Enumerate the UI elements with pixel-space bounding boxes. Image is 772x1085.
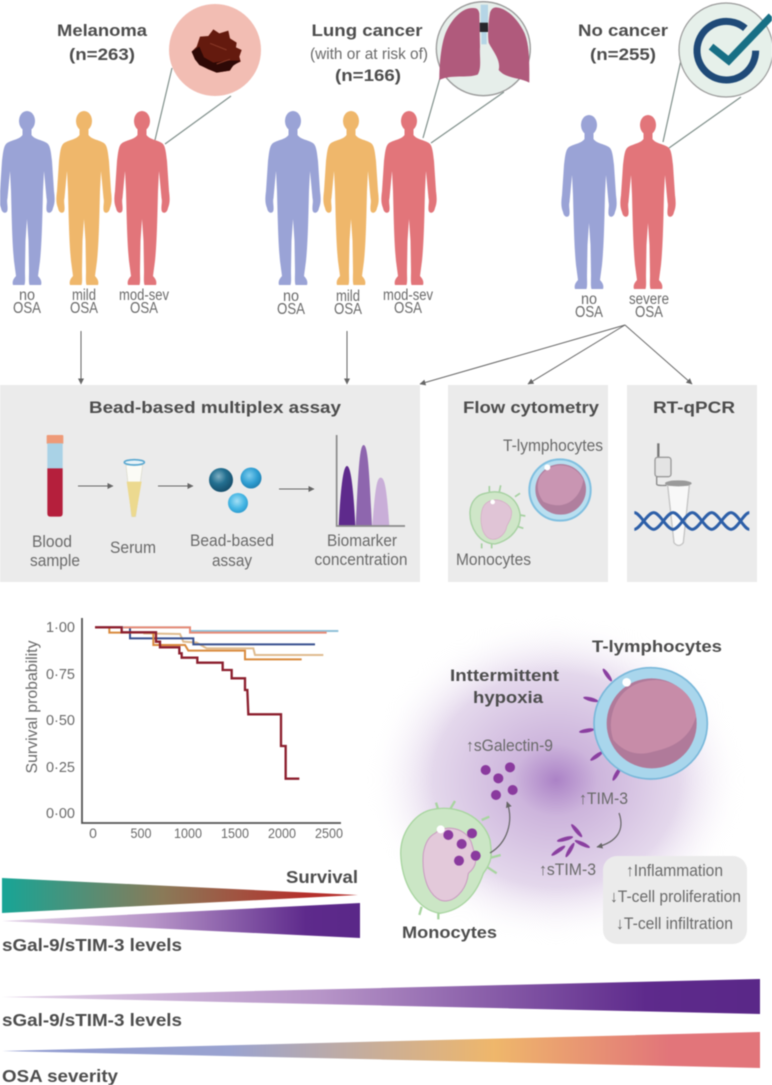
y-axis tick labels: 1·00 — [46, 620, 75, 636]
labels: lung OSA groups — [277, 287, 433, 318]
label: biomarker concentration: Biomarker — [327, 532, 397, 550]
y-axis tick labels: 0·75 — [46, 667, 75, 683]
axes — [82, 618, 341, 823]
labels: lung OSA groups: OSA — [334, 301, 363, 318]
person: lung mod-sev OSA — [381, 111, 437, 285]
chart: biomarker peaks — [337, 435, 405, 526]
heading: No cancer group: No cancer — [578, 21, 668, 40]
label: blood sample — [30, 533, 80, 570]
label: biomarker concentration — [314, 532, 408, 569]
arrow: TIM-3 to sTIM-3 — [597, 813, 621, 847]
arrow: monocyte to sGalectin-9 — [490, 802, 510, 853]
arrow: blood to serum — [78, 485, 113, 487]
labels: melanoma OSA groups: OSA — [70, 300, 99, 317]
labels: no cancer OSA groups: severe — [629, 291, 669, 308]
callout: immune effects: ↓T-cell proliferation — [610, 888, 741, 906]
icon: sGalectin-9 dots — [481, 762, 518, 800]
callout lines: lung — [423, 78, 504, 143]
person: melanoma mild OSA — [56, 111, 112, 285]
label: bead-based assay: assay — [212, 552, 253, 570]
label: sTIM-3: ↑sTIM-3 — [539, 861, 596, 879]
heading: bead-based multiplex assay: Bead-based multiplex assay — [89, 398, 342, 417]
label: bead-based assay — [190, 532, 274, 570]
icon: checkmark — [679, 3, 772, 97]
label: Monocytes heading: Monocytes — [402, 923, 497, 942]
x-axis tick labels: 1000 — [174, 825, 202, 841]
person: lung mild OSA — [323, 111, 379, 285]
icon: monocyte large — [401, 801, 501, 919]
heading: flow cytometry: Flow cytometry — [463, 398, 600, 417]
survival curves — [95, 627, 338, 779]
label: blood sample: Blood — [32, 533, 72, 551]
heading: Lung cancer group — [310, 21, 428, 85]
labels: melanoma OSA groups: mild — [72, 287, 96, 304]
heading: Melanoma group: (n=263) — [69, 45, 135, 64]
labels: melanoma OSA groups: OSA — [13, 300, 42, 317]
wedge: survival — [2, 878, 358, 913]
label: intermittent hypoxia: Inttermittent — [450, 666, 559, 685]
person: melanoma mod-sev OSA — [114, 111, 170, 285]
label: T-lymphocytes heading: T-lymphocytes — [592, 637, 722, 656]
label: sGalectin-9: ↑sGalectin-9 — [466, 737, 553, 755]
background glow: intermittent hypoxia — [366, 615, 746, 945]
label: Monocytes: Monocytes — [456, 551, 531, 569]
label: blood sample: sample — [30, 552, 80, 570]
y-axis title: Survival probability — [24, 640, 41, 774]
label: bead-based assay: Bead-based — [190, 532, 274, 550]
labels: lung OSA groups: mod-sev — [383, 287, 433, 304]
callout: immune effects — [603, 856, 747, 944]
x-axis tick labels: 2500 — [315, 825, 343, 841]
x-axis tick labels: 0 — [89, 825, 97, 841]
person: lung no OSA — [265, 111, 321, 285]
icon: blood tube — [47, 435, 63, 517]
labels: lung OSA groups: mild — [336, 288, 360, 305]
panel: bead-based multiplex assay — [0, 385, 420, 582]
icon: sTIM-3 fragments — [550, 823, 591, 858]
label: sGal-9/sTIM-3 levels upper: sGal-9/sTIM-3 levels — [2, 935, 182, 955]
arrow: serum to beads — [158, 485, 193, 487]
y-axis tick labels: 0·25 — [46, 760, 75, 776]
icon: serum tube — [124, 460, 144, 517]
panel: flow cytometry — [448, 385, 608, 582]
callout: immune effects: ↓T-cell infiltration — [616, 915, 733, 933]
label: intermittent hypoxia: hypoxia — [473, 688, 544, 707]
x-axis tick labels: 1500 — [221, 825, 249, 841]
callout: immune effects: ↑Inflammation — [626, 862, 723, 880]
chart: Kaplan-Meier survival curves — [24, 618, 343, 841]
label: sGal-9/sTIM-3 levels lower: sGal-9/sTIM-3 levels — [2, 1010, 182, 1030]
arrows: cohorts to assays — [81, 325, 692, 384]
label: biomarker concentration: concentration — [314, 551, 408, 569]
labels: no cancer OSA groups: OSA — [635, 304, 664, 321]
y-axis tick labels: 0·00 — [46, 806, 75, 822]
labels: no cancer OSA groups: OSA — [575, 304, 604, 321]
wedge: sGal-9/sTIM-3 long — [2, 979, 760, 1014]
heading: Melanoma group: Melanoma — [57, 21, 148, 40]
labels: lung OSA groups: OSA — [394, 300, 423, 317]
wedge: sGal-9/sTIM-3 short — [2, 903, 360, 938]
icon: lungs — [436, 2, 530, 96]
heading: No cancer group — [578, 21, 668, 64]
heading: Lung cancer group: (with or at risk of) — [310, 46, 428, 63]
heading: Lung cancer group: (n=166) — [335, 66, 401, 85]
labels: no cancer OSA groups: no — [581, 291, 597, 308]
label: T-lymphocytes: T-lymphocytes — [503, 437, 603, 455]
panel: RT-qPCR — [627, 385, 757, 582]
y-axis tick labels — [46, 620, 75, 822]
icon: melanoma lesion — [169, 4, 261, 96]
x-axis tick labels: 2000 — [268, 825, 296, 841]
labels: lung OSA groups: no — [283, 288, 299, 305]
heading: RT-qPCR: RT-qPCR — [653, 398, 735, 417]
icon: T-lymphocyte large with TIM-3 receptors — [579, 668, 707, 782]
labels: melanoma OSA groups: no — [19, 287, 35, 304]
callout lines: melanoma — [155, 68, 231, 144]
heading: No cancer group: (n=255) — [590, 45, 656, 64]
labels: melanoma OSA groups: mod-sev — [119, 287, 169, 304]
x-axis tick labels: 500 — [130, 825, 152, 841]
y-axis tick labels: 0·50 — [46, 713, 75, 729]
callout lines: no cancer — [663, 60, 741, 148]
wedge: OSA severity — [2, 1032, 760, 1068]
label: survival: Survival — [286, 867, 358, 887]
labels: no cancer OSA groups — [575, 291, 669, 321]
person: no cancer no OSA — [561, 115, 617, 289]
icon: T-lymphocyte cell — [529, 459, 591, 521]
icon: PCR tube and DNA — [634, 443, 749, 545]
arrow: beads to biomarker — [279, 488, 314, 490]
x-axis tick labels — [89, 825, 343, 841]
label: TIM-3: ↑TIM-3 — [579, 790, 628, 808]
heading: Lung cancer group: Lung cancer — [312, 21, 423, 40]
labels: melanoma OSA groups — [13, 287, 169, 317]
label: intermittent hypoxia — [450, 666, 559, 707]
label: serum: Serum — [110, 539, 156, 557]
person: no cancer severe OSA — [620, 115, 676, 289]
icon: monocyte cell — [470, 485, 525, 548]
heading: Melanoma group — [57, 21, 148, 64]
person: melanoma no OSA — [0, 111, 55, 285]
labels: melanoma OSA groups: OSA — [130, 300, 159, 317]
labels: lung OSA groups: OSA — [277, 301, 306, 318]
icon: beads — [209, 468, 262, 513]
